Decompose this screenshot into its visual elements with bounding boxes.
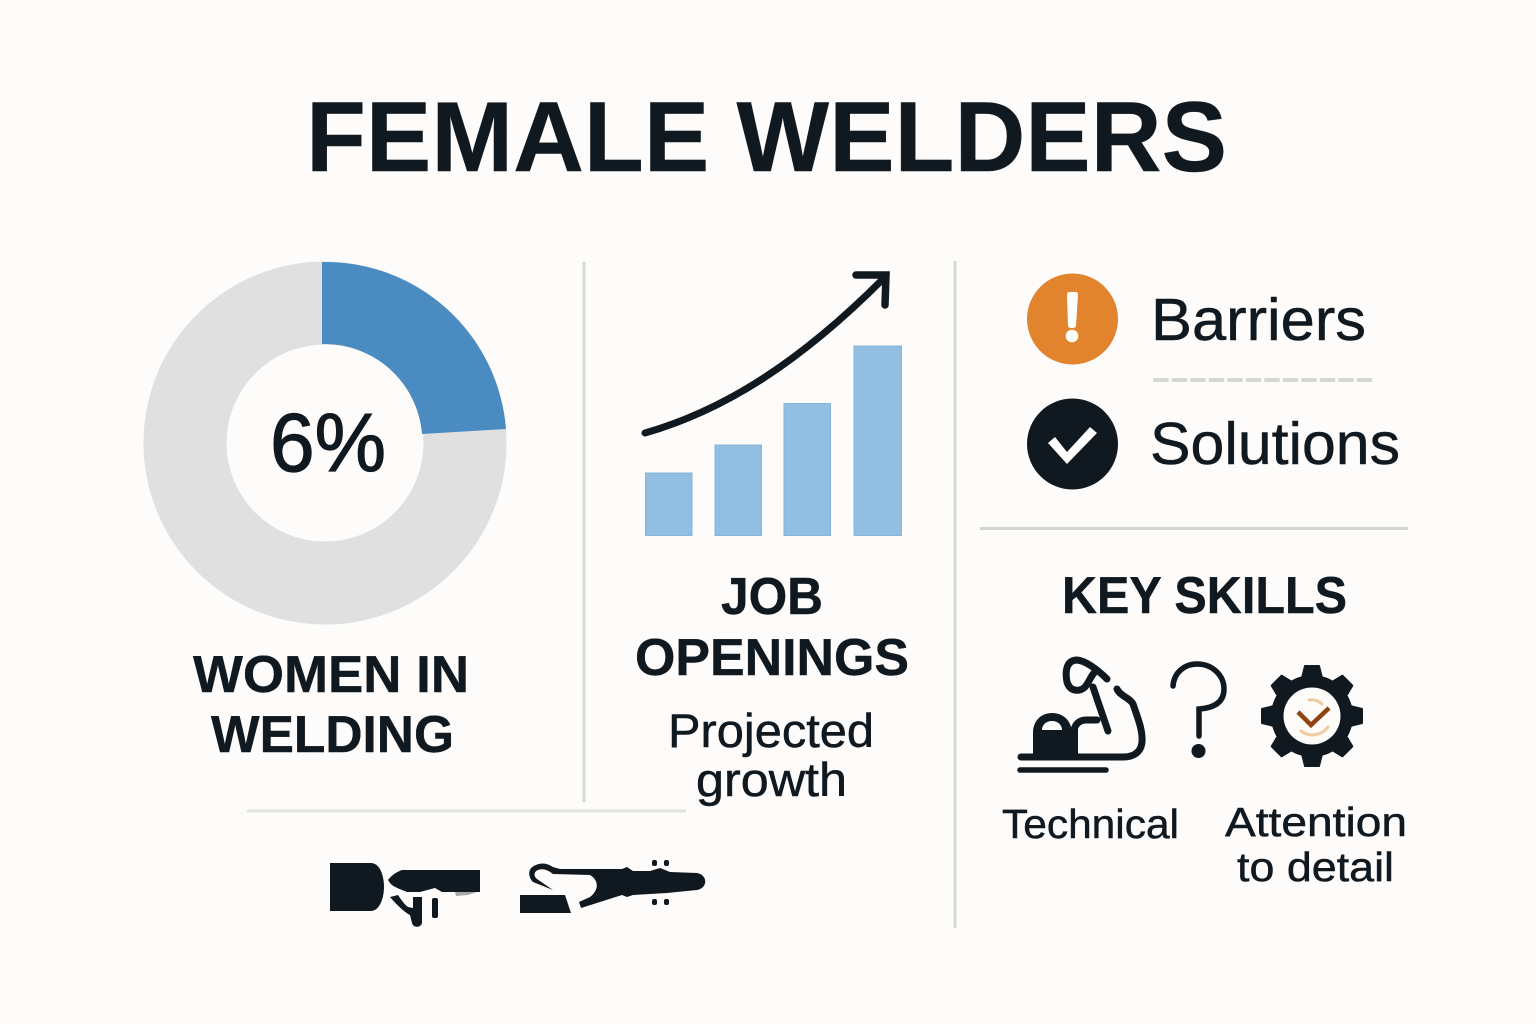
text: projected growth: growth bbox=[696, 753, 847, 806]
label: attention to detail: Attention bbox=[1225, 799, 1407, 845]
panel: key skills bbox=[1002, 567, 1407, 890]
icon: welding torch right bbox=[520, 860, 705, 913]
heading: job openings: OPENINGS bbox=[635, 629, 909, 687]
heading: women in welding: WELDING bbox=[211, 706, 454, 764]
bar chart bbox=[646, 346, 902, 536]
icon: question mark bbox=[1173, 664, 1224, 758]
panel: welding icons bbox=[330, 860, 705, 927]
statistic: 6%: 6% bbox=[270, 396, 386, 489]
arrow: growth trend bbox=[645, 275, 886, 433]
icon: check bbox=[1027, 398, 1118, 490]
title: FEMALE WELDERS bbox=[306, 81, 1227, 192]
text: projected growth: Projected bbox=[668, 704, 874, 757]
text: projected growth bbox=[668, 704, 874, 806]
label: technical: Technical bbox=[1002, 801, 1179, 847]
icon: technical welder bbox=[1020, 660, 1142, 770]
panel: job openings bbox=[635, 275, 909, 806]
panel: women in welding bbox=[185, 262, 506, 764]
icon: gear with check bbox=[1262, 666, 1362, 766]
label: attention to detail: to detail bbox=[1237, 844, 1394, 890]
heading: women in welding: WOMEN IN bbox=[193, 646, 469, 704]
heading: job openings bbox=[635, 568, 909, 687]
label: barriers: Barriers bbox=[1151, 287, 1366, 353]
heading: job openings: JOB bbox=[721, 568, 823, 626]
icon: welding torch left bbox=[330, 863, 480, 927]
heading: key skills: KEY SKILLS bbox=[1062, 567, 1347, 625]
heading: women in welding bbox=[193, 646, 469, 764]
label: solutions: Solutions bbox=[1150, 411, 1400, 477]
label: attention to detail bbox=[1225, 799, 1407, 890]
panel: barriers and solutions bbox=[1027, 274, 1400, 490]
icon: warning bbox=[1027, 274, 1118, 364]
donut chart bbox=[185, 262, 506, 583]
